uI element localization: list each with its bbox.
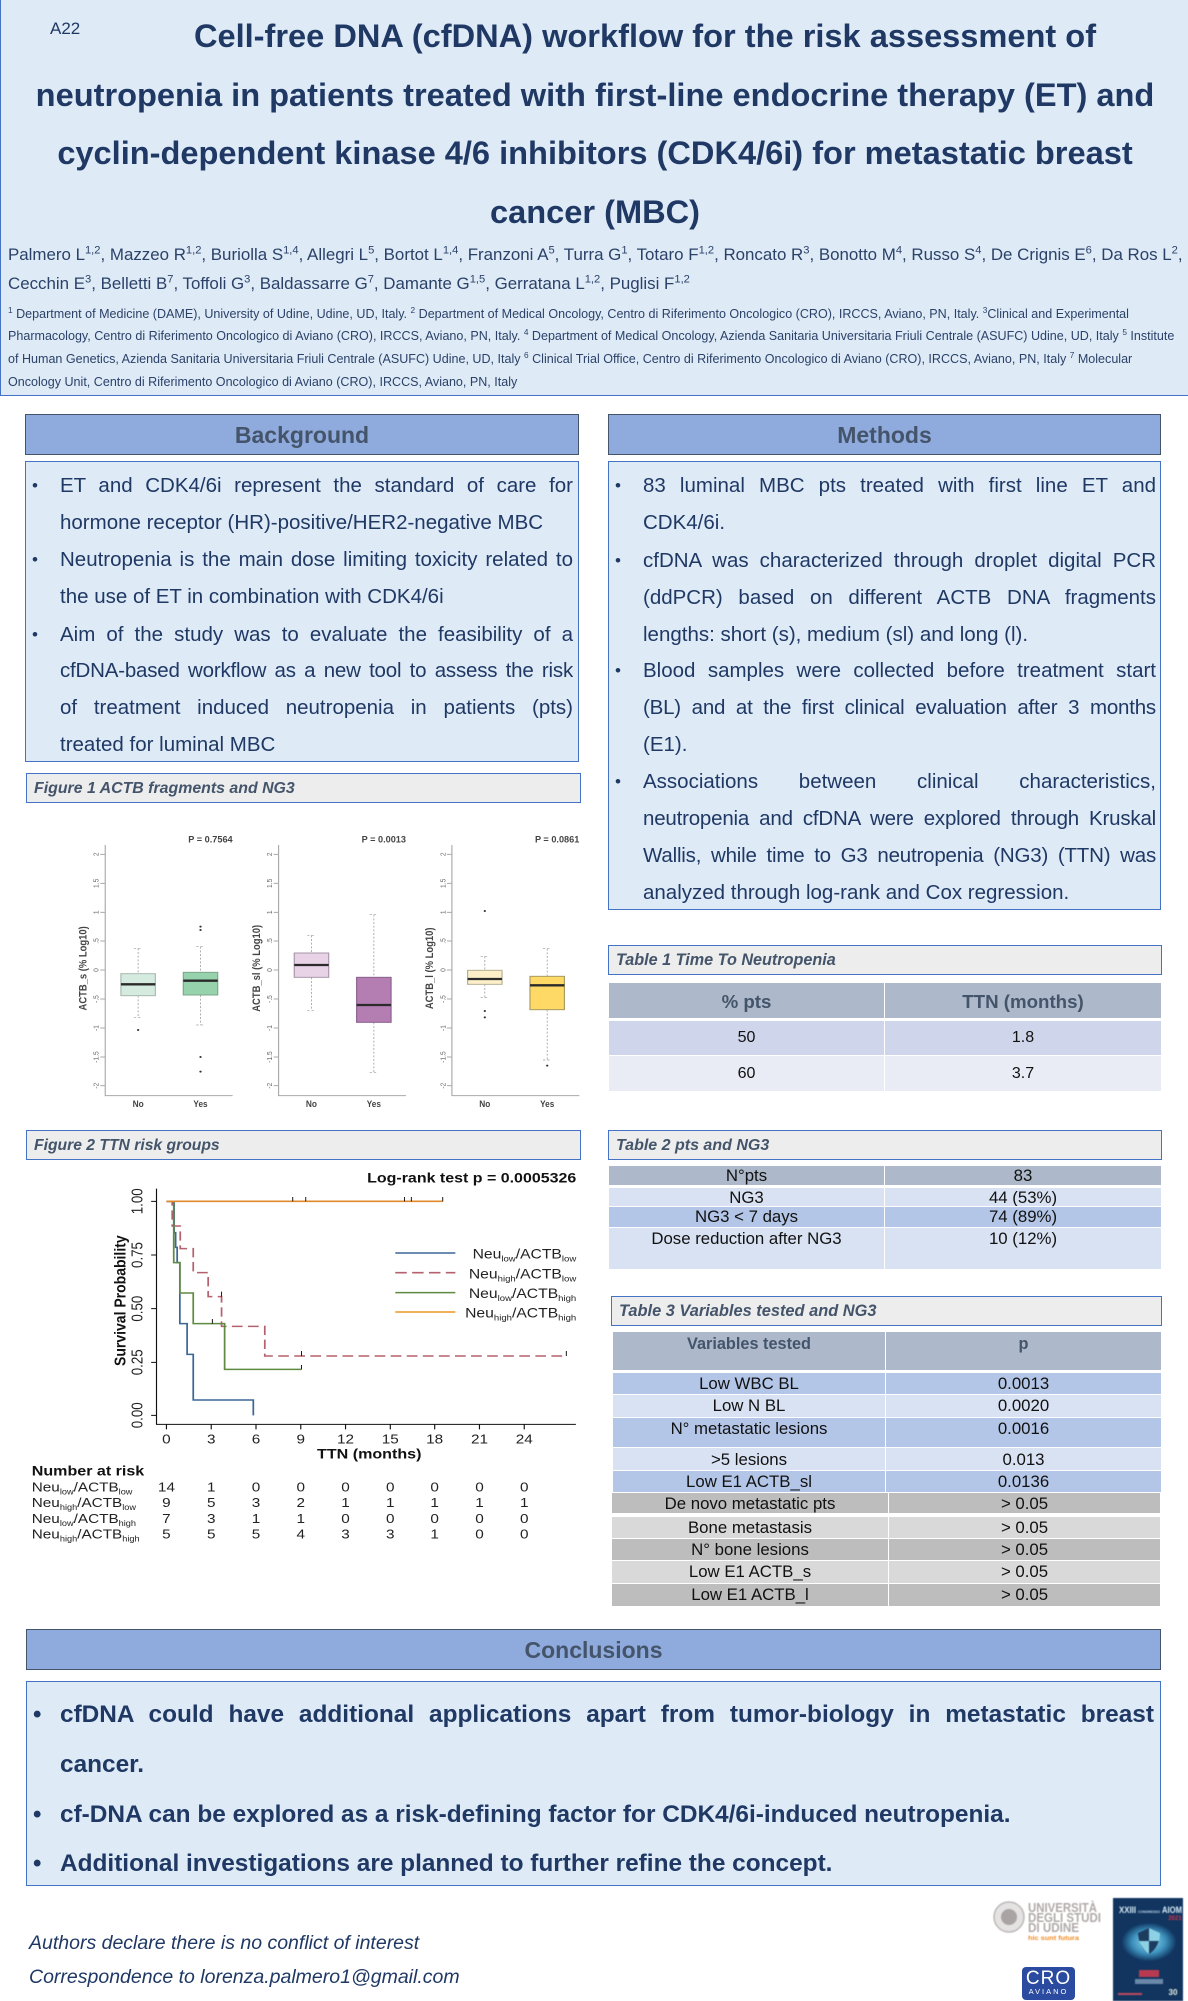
legend: /ACTB bbox=[516, 1267, 562, 1282]
boxplot: ACTB_l: No bbox=[479, 1100, 490, 1110]
boxplot: ACTB_sl: Yes bbox=[367, 1100, 381, 1110]
axes: 9 bbox=[297, 1433, 305, 1447]
table 2: patients and NG3: 10 (12%) bbox=[989, 1229, 1057, 1248]
axes: 1.00 bbox=[130, 1188, 147, 1214]
boxplot: ACTB_l: 0 bbox=[439, 968, 448, 972]
axes: Log-rank test p = 0.0005326 bbox=[367, 1171, 576, 1186]
boxplot: ACTB_sl: 1.5 bbox=[266, 879, 274, 888]
title: Cell-free DNA (cfDNA) workflow for the risk assessment of bbox=[194, 17, 1096, 54]
table 3: variables tested: 0.0016 bbox=[998, 1419, 1049, 1438]
number at risk table: 0 bbox=[341, 1480, 350, 1495]
boxplot: ACTB_sl: -2 bbox=[266, 1083, 274, 1089]
number at risk table: 0 bbox=[520, 1512, 529, 1527]
boxplot: ACTB_sl: 0 bbox=[266, 968, 274, 972]
table 2: patients and NG3: 83 bbox=[1014, 1166, 1032, 1185]
number at risk table: Neu bbox=[32, 1480, 60, 1495]
legend bbox=[395, 1248, 577, 1323]
panel: methods text: (ddPCR) based on different ACTB DNA fragments bbox=[643, 586, 1156, 609]
affiliations: of Human Genetics, Azienda Sanitaria Universitaria Friuli Centrale (ASUFC) Udine, UD, Italy 6 Clinical Trial Office, Centro di Riferimento Oncologico di Aviano (CRO), IRCCS, Aviano, PN, Italy 7 Molecular bbox=[8, 351, 1132, 366]
boxplot: ACTB_l: 1.5 bbox=[439, 879, 448, 888]
panel: conclusions: cancer. bbox=[60, 1751, 144, 1778]
panel: methods text: Wallis, while time to G3 neutropenia (NG3) (TTN) was bbox=[643, 844, 1156, 867]
figure 1 title bbox=[26, 773, 581, 803]
boxplot: ACTB_sl: P = 0.0013 bbox=[362, 835, 407, 845]
affiliations: Pharmacology, Centro di Riferimento Oncologico di Aviano (CRO), IRCCS, Aviano, PN, Italy. 4 Department of Medical Oncology, Azienda Sanitaria Universitaria Friuli Centrale (ASUFC) Udine, UD, Italy 5 Institute bbox=[8, 328, 1174, 343]
boxplot: ACTB_l: 1 bbox=[439, 910, 448, 914]
number at risk table: /ACTB bbox=[74, 1480, 119, 1495]
panel: conclusions: cf-DNA can be explored as a risk-defining factor for CDK4/6i-induced neutropenia. bbox=[60, 1801, 1010, 1828]
legend: high bbox=[558, 1294, 576, 1303]
panel: background text: the use of ET in combination with CDK4/6i bbox=[60, 585, 444, 608]
legend: Neu bbox=[469, 1267, 498, 1282]
table 3: variables tested: > 0.05 bbox=[1001, 1518, 1048, 1537]
affiliations bbox=[8, 306, 1174, 389]
affiliations: 1 Department of Medicine (DAME), University of Udine, Udine, UD, Italy. 2 Department of Medical Oncology, Centro di Riferimento Oncologico (CRO), IRCCS, Aviano, PN, Italy. 3Clinical and Experimental bbox=[8, 306, 1129, 321]
number at risk table: 0 bbox=[386, 1512, 395, 1527]
number at risk table: low bbox=[60, 1519, 74, 1528]
number at risk table: 3 bbox=[252, 1496, 260, 1511]
table 3: variables tested: Low E1 ACTB_s bbox=[689, 1562, 811, 1581]
heading: Methods: Methods bbox=[837, 422, 932, 448]
number at risk table: 1 bbox=[475, 1496, 484, 1511]
authors: Cecchin E3, Belletti B7, Toffoli G3, Baldassarre G7, Damante G1,5, Gerratana L1,2, Puglisi F1,2 bbox=[8, 273, 690, 293]
table 2: patients and NG3: 74 (89%) bbox=[989, 1207, 1057, 1226]
number at risk table: 1 bbox=[297, 1512, 305, 1527]
table 3: variables tested: De novo metastatic pts bbox=[665, 1494, 835, 1513]
table 2 title bbox=[608, 1130, 1162, 1160]
panel: background text: • bbox=[32, 476, 38, 495]
boxplot: ACTB_l: ACTB_l (% Log10) bbox=[425, 928, 436, 1009]
number at risk table: 14 bbox=[158, 1480, 175, 1495]
panel: background text: • bbox=[32, 550, 38, 569]
number at risk table: high bbox=[60, 1534, 77, 1544]
number at risk table: high bbox=[119, 1519, 136, 1528]
panel: background text: ET and CDK4/6i represent the standard of care for bbox=[60, 474, 573, 497]
authors bbox=[8, 244, 1183, 293]
number at risk table: high bbox=[122, 1534, 140, 1544]
number at risk table: Neu bbox=[32, 1496, 60, 1511]
logo: CRO Aviano: CRO bbox=[1026, 1968, 1071, 1989]
table 3: variables tested: Low E1 ACTB_sl bbox=[686, 1472, 812, 1491]
conference cover: AIOM 2021 bbox=[1112, 1897, 1184, 2001]
number at risk table: 0 bbox=[430, 1480, 439, 1495]
panel: background text: cfDNA-based workflow as a new tool to assess the risk bbox=[60, 659, 573, 682]
number at risk table: 0 bbox=[430, 1512, 439, 1527]
boxplot: ACTB_sl: .5 bbox=[266, 938, 274, 944]
legend: /ACTB bbox=[512, 1307, 558, 1321]
number at risk table: 1 bbox=[252, 1512, 260, 1527]
legend: low bbox=[562, 1254, 577, 1264]
boxplot: ACTB_sl: No bbox=[306, 1100, 317, 1110]
number at risk table: 0 bbox=[475, 1480, 484, 1495]
abstract code: A22 bbox=[50, 19, 80, 38]
boxplot: ACTB_s: -2 bbox=[92, 1083, 101, 1089]
title: cyclin-dependent kinase 4/6 inhibitors (CDK4/6i) for metastatic breast bbox=[57, 134, 1133, 171]
number at risk table: 0 bbox=[386, 1480, 395, 1495]
axes: 18 bbox=[426, 1433, 443, 1447]
boxplot: ACTB_l: -.5 bbox=[439, 995, 448, 1003]
boxplot: ACTB_sl: ACTB_sl (% Log10) bbox=[251, 925, 263, 1012]
table 3 title bbox=[611, 1296, 1162, 1326]
number at risk table: 1 bbox=[386, 1496, 395, 1511]
panel: methods text: • bbox=[615, 661, 621, 680]
heading: Background: Background bbox=[235, 422, 369, 448]
panel: methods text: neutropenia and cfDNA were explored through Kruskal bbox=[643, 807, 1156, 830]
table 1 title bbox=[608, 945, 1162, 975]
panel: background text: hormone receptor (HR)-positive/HER2-negative MBC bbox=[60, 511, 543, 534]
number at risk table: Neu bbox=[32, 1512, 60, 1527]
legend: /ACTB bbox=[516, 1248, 562, 1262]
conference cover: AIOM 2021: 30 bbox=[1169, 1988, 1178, 1997]
panel: conclusions: • bbox=[33, 1801, 41, 1828]
logo: University of Udine bbox=[992, 1900, 1101, 1942]
number at risk table: /ACTB bbox=[77, 1496, 122, 1511]
footer note: Authors declare there is no conflict of interest bbox=[29, 1932, 419, 1954]
number at risk table: Neu bbox=[32, 1528, 60, 1542]
number at risk table: 2 bbox=[297, 1496, 305, 1511]
table 1 title: Table 1 Time To Neutropenia bbox=[616, 951, 836, 969]
panel: methods text bbox=[608, 461, 1161, 910]
number at risk table: /ACTB bbox=[77, 1528, 122, 1542]
table 1: time to neutropenia: 60 bbox=[738, 1065, 755, 1082]
boxplot: ACTB_s: 1.5 bbox=[92, 879, 101, 888]
panel: conclusions: Additional investigations are planned to further refine the concept. bbox=[60, 1850, 832, 1877]
logo: University of Udine: UNIVERSITÀ bbox=[1028, 1900, 1097, 1915]
conference cover: AIOM 2021: XXIII bbox=[1119, 1905, 1136, 1915]
survival curves bbox=[166, 1197, 566, 1415]
boxplot: ACTB_l: P = 0.0861 bbox=[535, 835, 580, 845]
table 3: variables tested: N° bone lesions bbox=[691, 1540, 809, 1559]
table 3: variables tested: > 0.05 bbox=[1001, 1585, 1048, 1604]
number at risk table: high bbox=[60, 1503, 77, 1512]
axes: 12 bbox=[337, 1433, 354, 1447]
panel: methods text: CDK4/6i. bbox=[643, 511, 725, 534]
heading: Methods bbox=[608, 414, 1161, 455]
legend: high bbox=[498, 1274, 516, 1283]
table 3: variables tested: 0.013 bbox=[1002, 1450, 1044, 1469]
legend: high bbox=[494, 1313, 512, 1323]
boxplot: ACTB_s: 0 bbox=[92, 968, 101, 972]
panel: conclusions: cfDNA could have additional applications apart from tumor-biology in metastatic breast bbox=[60, 1701, 1154, 1728]
title: cancer (MBC) bbox=[490, 193, 700, 230]
axes: 0 bbox=[162, 1433, 171, 1447]
number at risk table: 0 bbox=[297, 1480, 305, 1495]
number at risk table: 1 bbox=[430, 1528, 439, 1542]
number at risk table: 1 bbox=[341, 1496, 350, 1511]
table 2: patients and NG3: Dose reduction after NG3 bbox=[651, 1229, 842, 1248]
axes: 15 bbox=[382, 1433, 399, 1447]
legend: low bbox=[498, 1294, 513, 1303]
boxplot: ACTB_s bbox=[78, 835, 233, 1110]
number at risk table: 0 bbox=[475, 1512, 484, 1527]
axes: Survival Probability bbox=[112, 1235, 130, 1366]
heading: Conclusions: Conclusions bbox=[524, 1637, 662, 1663]
panel: methods text: Associations between clinical characteristics, bbox=[643, 770, 1156, 793]
number at risk table bbox=[32, 1463, 529, 1544]
panel: conclusions: • bbox=[33, 1850, 41, 1877]
table 3: variables tested: 0.0136 bbox=[998, 1472, 1049, 1491]
logo: University of Udine: hic sunt futura bbox=[1028, 1935, 1079, 1942]
number at risk table: 5 bbox=[252, 1528, 260, 1542]
conference cover: AIOM 2021: 2021 bbox=[1168, 1916, 1182, 1922]
panel: conclusions: • bbox=[33, 1701, 41, 1728]
conference cover: AIOM 2021: CONGRESSO bbox=[1138, 1909, 1160, 1914]
boxplot: ACTB_s: Yes bbox=[193, 1100, 208, 1110]
legend: /ACTB bbox=[512, 1287, 558, 1302]
number at risk table: /ACTB bbox=[74, 1512, 119, 1527]
boxplot: ACTB_l: 2 bbox=[439, 852, 448, 856]
title: neutropenia in patients treated with first-line endocrine therapy (ET) and bbox=[36, 76, 1154, 113]
boxplot: ACTB_s: P = 0.7564 bbox=[188, 835, 233, 845]
boxplot: ACTB_s: ACTB_s (% Log10) bbox=[78, 926, 90, 1010]
boxplot: ACTB_s: .5 bbox=[92, 938, 101, 944]
figure 1 title: Figure 1 ACTB fragments and NG3 bbox=[34, 780, 295, 797]
axes: 6 bbox=[252, 1433, 260, 1447]
number at risk table: low bbox=[119, 1487, 133, 1496]
number at risk table: 1 bbox=[207, 1480, 215, 1495]
axes: 24 bbox=[516, 1433, 533, 1447]
figure 2 title bbox=[26, 1130, 581, 1160]
table 3: variables tested: Bone metastasis bbox=[688, 1518, 812, 1537]
number at risk table: 5 bbox=[207, 1528, 215, 1542]
number at risk table: 0 bbox=[520, 1528, 529, 1542]
boxplot: ACTB_l: .5 bbox=[439, 938, 448, 944]
table 2: patients and NG3: NG3 < 7 days bbox=[695, 1207, 798, 1226]
legend: high bbox=[558, 1313, 576, 1323]
panel: background text: Aim of the study was to evaluate the feasibility of a bbox=[60, 623, 573, 646]
panel: methods text: 83 luminal MBC pts treated with first line ET and bbox=[643, 474, 1156, 497]
panel: background text: Neutropenia is the main dose limiting toxicity related to bbox=[60, 548, 573, 571]
axes: 0.00 bbox=[130, 1402, 147, 1428]
table 3: variables tested: Variables tested bbox=[687, 1335, 811, 1353]
panel: methods text: Blood samples were collected before treatment start bbox=[643, 659, 1156, 682]
boxplot: ACTB_sl: -.5 bbox=[266, 995, 274, 1003]
panel: background text: treated for luminal MBC bbox=[60, 733, 275, 756]
boxplot: ACTB_l: -1.5 bbox=[439, 1051, 448, 1063]
authors: Palmero L1,2, Mazzeo R1,2, Buriolla S1,4, Allegri L5, Bortot L1,4, Franzoni A5, Turra G1, Totaro F1,2, Roncato R3, Bonotto M4, Russo S4, De Crignis E6, Da Ros L2, bbox=[8, 244, 1183, 264]
table 1: time to neutropenia: TTN (months) bbox=[962, 991, 1084, 1012]
table 2: patients and NG3 bbox=[609, 1166, 1161, 1269]
boxplot: ACTB_sl: -1.5 bbox=[266, 1051, 274, 1063]
number at risk table: 3 bbox=[207, 1512, 215, 1527]
table 2 title: Table 2 pts and NG3 bbox=[616, 1137, 769, 1154]
table 3: variables tested: 0.0013 bbox=[998, 1374, 1049, 1393]
boxplot: ACTB_sl: -1 bbox=[266, 1025, 274, 1031]
legend: Neu bbox=[473, 1248, 501, 1262]
axes: 3 bbox=[207, 1433, 215, 1447]
number at risk table: 1 bbox=[430, 1496, 439, 1511]
boxplot: ACTB_s: 2 bbox=[92, 852, 101, 856]
panel: methods text: • bbox=[615, 772, 621, 791]
table 1: time to neutropenia: 3.7 bbox=[1012, 1065, 1034, 1082]
heading: Background bbox=[25, 414, 579, 455]
table 3: variables tested: >5 lesions bbox=[711, 1450, 787, 1469]
chart: Kaplan-Meier TTN curves with risk table bbox=[32, 1171, 577, 1544]
legend: Neu bbox=[465, 1307, 494, 1321]
axes: TTN (months) bbox=[317, 1447, 421, 1462]
title bbox=[36, 17, 1154, 230]
number at risk table: 0 bbox=[475, 1528, 484, 1542]
affiliations: Oncology Unit, Centro di Riferimento Oncologico di Aviano (CRO), IRCCS, Aviano, PN, Italy bbox=[8, 375, 517, 389]
legend: low bbox=[562, 1274, 577, 1283]
panel: methods text: (BL) and at the first clinical evaluation after 3 months bbox=[643, 696, 1156, 719]
footer note: Correspondence to lorenza.palmero1@gmail.com bbox=[29, 1966, 460, 1988]
table 2: patients and NG3: N°pts bbox=[726, 1166, 767, 1185]
boxplot: ACTB_s: -1.5 bbox=[92, 1051, 101, 1063]
boxplot: ACTB_s: 1 bbox=[92, 910, 101, 914]
number at risk table: 0 bbox=[341, 1512, 350, 1527]
number at risk table: Number at risk bbox=[32, 1463, 145, 1479]
axes: 21 bbox=[471, 1433, 488, 1447]
boxplot: ACTB_s: -1 bbox=[92, 1025, 101, 1031]
number at risk table: 7 bbox=[162, 1512, 171, 1527]
number at risk table: 5 bbox=[162, 1528, 171, 1542]
logo: CRO Aviano: AVIANO bbox=[1029, 1987, 1068, 1996]
boxplot: ACTB_l: -1 bbox=[439, 1025, 448, 1031]
table 1: time to neutropenia: 50 bbox=[738, 1029, 755, 1046]
boxplot: ACTB_s: -.5 bbox=[92, 995, 101, 1003]
table 3: variables tested: > 0.05 bbox=[1001, 1494, 1048, 1513]
boxplot: ACTB_sl: 2 bbox=[266, 852, 274, 856]
boxplot: ACTB_sl: 1 bbox=[266, 910, 274, 914]
panel: background text: • bbox=[32, 625, 38, 644]
boxplot: ACTB_l: -2 bbox=[439, 1083, 448, 1089]
table 3: variables tested: > 0.05 bbox=[1001, 1562, 1048, 1581]
number at risk table: low bbox=[122, 1503, 137, 1512]
axes bbox=[112, 1171, 576, 1462]
axes: 0.50 bbox=[130, 1296, 147, 1322]
number at risk table: low bbox=[60, 1487, 74, 1496]
panel: methods text: • bbox=[615, 476, 621, 495]
table 3: variables tested: > 0.05 bbox=[1001, 1540, 1048, 1559]
panel: methods text: cfDNA was characterized through droplet digital PCR bbox=[643, 549, 1156, 572]
boxplot: ACTB_l bbox=[425, 835, 580, 1110]
number at risk table: 3 bbox=[341, 1528, 350, 1542]
boxplot: ACTB_l: Yes bbox=[540, 1100, 554, 1110]
boxplot: ACTB_sl bbox=[251, 835, 407, 1110]
header panel bbox=[0, 0, 1188, 396]
panel: methods text: lengths: short (s), medium (sl) and long (l). bbox=[643, 623, 1028, 646]
panel: conclusions bbox=[26, 1681, 1161, 1886]
table 3: variables tested: N° metastatic lesions bbox=[671, 1419, 827, 1438]
table 3: variables tested bbox=[612, 1332, 1161, 1606]
logo: CRO Aviano bbox=[1022, 1967, 1075, 2000]
legend: low bbox=[501, 1254, 516, 1264]
table 1: time to neutropenia: 1.8 bbox=[1012, 1029, 1034, 1046]
legend: Neu bbox=[469, 1287, 498, 1302]
chart: ACTB boxplots bbox=[78, 835, 580, 1110]
boxplot: ACTB_s: No bbox=[133, 1100, 144, 1110]
table 3: variables tested: Low N BL bbox=[713, 1396, 785, 1415]
number at risk table: 5 bbox=[207, 1496, 215, 1511]
heading: Conclusions bbox=[26, 1629, 1161, 1670]
number at risk table: 0 bbox=[252, 1480, 260, 1495]
table 1: time to neutropenia bbox=[609, 983, 1161, 1091]
number at risk table: 9 bbox=[162, 1496, 171, 1511]
table 3: variables tested: 0.0020 bbox=[998, 1396, 1049, 1415]
panel: methods text: • bbox=[615, 551, 621, 570]
table 1: time to neutropenia: % pts bbox=[722, 991, 771, 1012]
number at risk table: 4 bbox=[297, 1528, 305, 1542]
axes: 0.25 bbox=[130, 1349, 147, 1375]
table 3: variables tested: Low E1 ACTB_l bbox=[691, 1585, 809, 1604]
number at risk table: 0 bbox=[520, 1480, 529, 1495]
logo: University of Udine: DEGLI STUDI bbox=[1028, 1911, 1101, 1925]
panel: methods text: (E1). bbox=[643, 733, 687, 756]
table 3: variables tested: p bbox=[1019, 1335, 1028, 1353]
figure 2 title: Figure 2 TTN risk groups bbox=[34, 1137, 220, 1154]
number at risk table: 1 bbox=[520, 1496, 529, 1511]
panel: background text bbox=[25, 461, 579, 762]
table 3 title: Table 3 Variables tested and NG3 bbox=[619, 1302, 876, 1320]
panel: background text: of treatment induced neutropenia in patients (pts) bbox=[60, 696, 573, 719]
axes: 0.75 bbox=[130, 1242, 147, 1268]
footer note bbox=[28, 1932, 460, 1988]
logo: University of Udine: DI UDINE bbox=[1028, 1921, 1079, 1935]
table 3: variables tested: Low WBC BL bbox=[699, 1374, 799, 1393]
number at risk table: 3 bbox=[386, 1528, 395, 1542]
panel: methods text: analyzed through log-rank and Cox regression. bbox=[643, 881, 1069, 904]
